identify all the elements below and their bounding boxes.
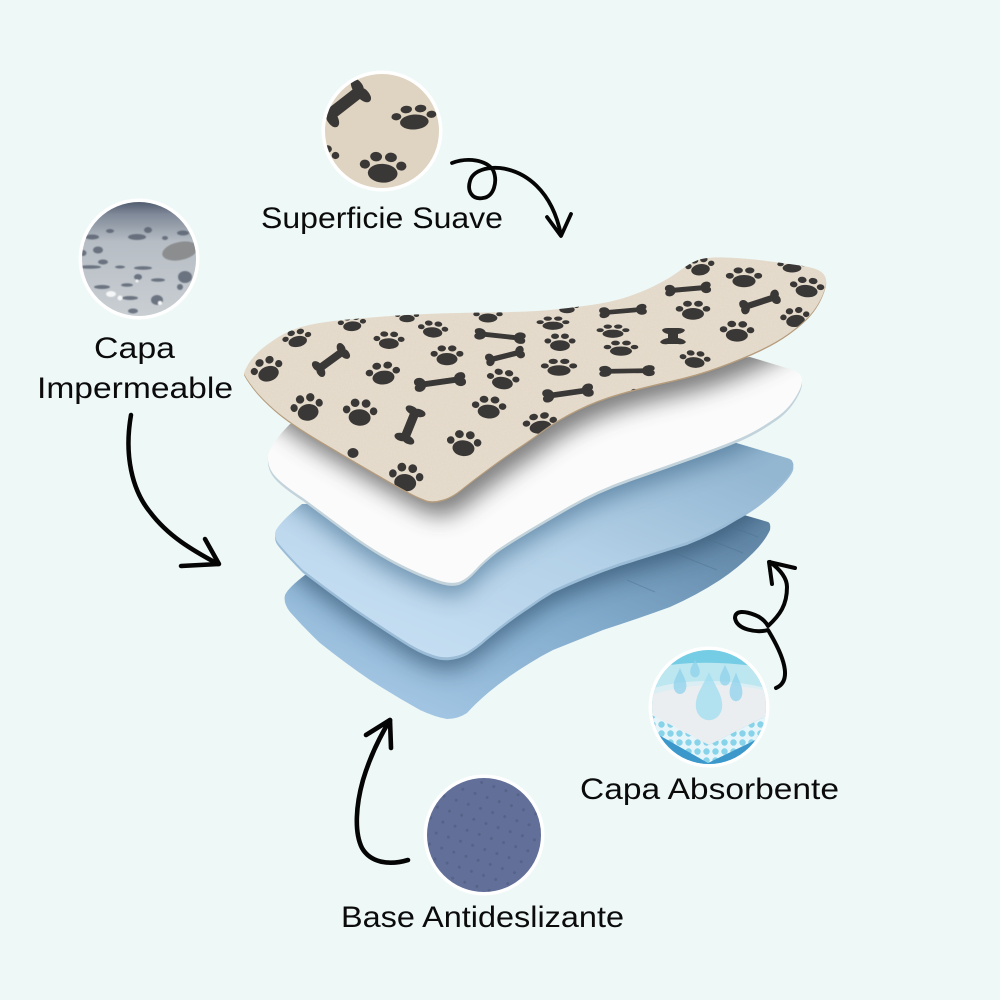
arrow: surface — [452, 160, 571, 236]
layer: non-slip base — [284, 515, 770, 719]
heading: Capa Absorbente: Capa Absorbente — [580, 773, 839, 806]
arrow: waterproof — [128, 415, 219, 566]
layer: absorbent — [275, 443, 794, 660]
heading: Capa Impermeable: Capa — [94, 332, 175, 365]
layer: waterproof white — [268, 357, 802, 586]
icon: water droplets swatch — [78, 198, 203, 323]
heading: Base Antideslizante: Base Antideslizante — [341, 901, 624, 934]
icon: soft surface swatch — [322, 70, 442, 192]
heading: Capa Impermeable: Impermeable — [37, 372, 233, 405]
arrow: absorbent — [735, 562, 795, 688]
arrow: base — [357, 720, 408, 863]
paw and bone pattern — [248, 255, 825, 494]
layer: soft paw-print surface — [240, 250, 835, 510]
icon: absorbent layer swatch — [648, 646, 773, 775]
icon: non-slip base swatch — [423, 774, 548, 899]
layered pad illustration — [240, 250, 835, 719]
heading: Superficie Suave: Superficie Suave — [261, 202, 503, 235]
heading: Capa Impermeable — [37, 332, 233, 405]
